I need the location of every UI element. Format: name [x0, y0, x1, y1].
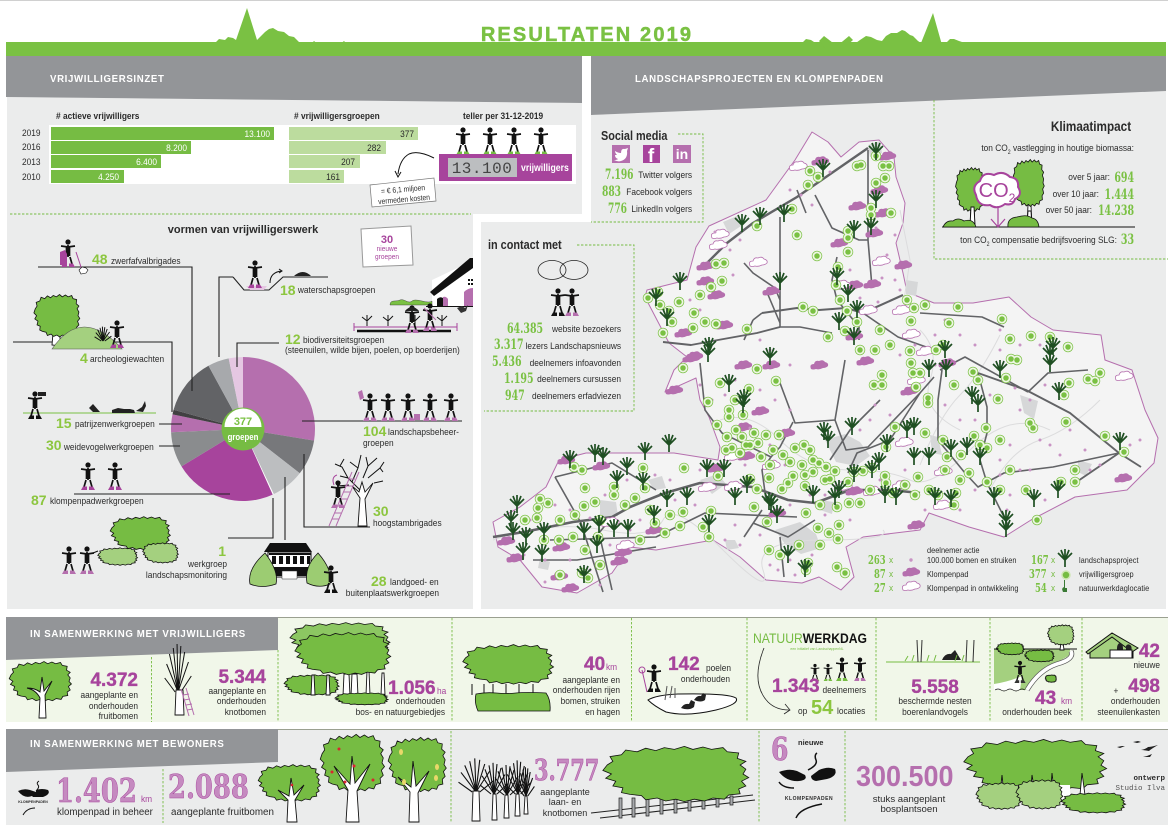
stat: 3.777 laan- en knotbomen: knotbomen — [543, 808, 587, 818]
label: 18 waterschapsgroepen — [280, 282, 375, 298]
stat: 2.088 fruitbomen: aangeplante fruitbomen — [171, 807, 274, 818]
stat: 3.777 laan- en knotbomen — [534, 753, 599, 818]
stat: 42 + 498 steenuilenkasten: steenuilenkasten — [1097, 706, 1160, 717]
icon: counter with volunteers: 13.100 — [452, 160, 512, 178]
label: 30 weidevogelwerkgroepen — [46, 437, 154, 453]
stat: 42 + 498 steenuilenkasten: + — [1114, 685, 1118, 696]
icon: tree on burial mound — [34, 295, 124, 349]
icon: meadow bird — [886, 640, 980, 662]
label: 30 weidevogelwerkgroepen: 30 — [46, 437, 62, 453]
chart: volunteers and groups bars: 8.200 — [166, 142, 187, 153]
pie leader lines — [13, 267, 462, 540]
heading: in contact met: in contact met — [488, 238, 562, 252]
chart: pie of 377 groups — [171, 357, 315, 501]
legend: map: Klompenpad — [927, 570, 968, 579]
chart: volunteers and groups bars: 377 — [400, 128, 414, 139]
panel: in contact met: 64.385 — [507, 319, 543, 336]
chart: volunteers and groups bars: 207 — [341, 156, 355, 167]
legend: map: 27 — [874, 581, 886, 595]
label: 30 weidevogelwerkgroepen: weidevogelwerkgroepen — [63, 441, 154, 452]
stat: 1.343 deelnemers op 54 locaties: op — [798, 705, 807, 716]
stat: 5.558 boerenlandvogels: beschermde nesten — [898, 695, 972, 706]
label: 30 hoogstambrigades — [373, 503, 442, 528]
callout: avoided costs: vermeden kosten — [378, 192, 430, 206]
stat: 40 km — [553, 654, 620, 717]
panel: landschapsprojecten — [481, 56, 1166, 609]
chart: volunteers and groups bars: # actieve vrijwilligers — [56, 110, 139, 121]
icon: bird watcher with partridges — [23, 391, 156, 419]
label: 4 archeologiewachten: 4 — [80, 350, 88, 366]
label: 12 biodiversiteitsgroepen — [285, 331, 460, 355]
panel: in contact met: deelnemers cursussen — [537, 373, 621, 384]
stat: 142 poelen — [668, 654, 731, 684]
legend: map: 377 — [1029, 567, 1047, 581]
chart: volunteers and groups bars: 2010 — [22, 171, 41, 182]
panel: in contact met: 947 — [505, 386, 525, 403]
icon: forest — [284, 623, 391, 705]
stat: 6 nieuwe klompenpaden — [771, 731, 836, 818]
map outline — [493, 132, 1158, 593]
chart: volunteers and groups bars: 6.400 — [136, 156, 157, 167]
stat: 4.372 fruitbomen: onderhouden — [89, 700, 138, 711]
chart: pie of 377 groups: 377 — [234, 416, 252, 428]
panel: klimaatimpact: over 5 jaar: — [1068, 171, 1110, 182]
stat: 40 km: aangeplante en — [562, 674, 620, 685]
stat: 300.500 bosplantsoen: stuks aangeplant — [873, 794, 946, 805]
stat: 300.500 bosplantsoen: bosplantsoen — [880, 804, 938, 815]
label: 48 zwerfafvalbrigades: 48 — [92, 251, 108, 267]
chart: volunteers and groups bars: 2016 — [22, 141, 41, 152]
panel: klimaatimpact: 694 — [1114, 168, 1134, 185]
icon: five landscape managers — [358, 390, 458, 421]
icon: ditch worker — [233, 260, 328, 290]
klompenpad blobs — [497, 151, 1132, 592]
landscape project markers — [504, 142, 1127, 583]
panel: in samenwerking met bewoners — [6, 729, 1168, 825]
label: 15 patrijzenwerkgroepen: 15 — [56, 415, 72, 431]
label: 12 biodiversiteitsgroepen: (steenuilen, wilde bijen, poelen, op boerderijen) — [285, 344, 460, 355]
chart: pie of 377 groups: groepen — [228, 431, 258, 442]
label: 12 biodiversiteitsgroepen: biodiversiteitsgroepen — [303, 334, 384, 345]
rivers and minor roads — [493, 210, 1100, 581]
icon: high-stem pruning with ladder — [329, 455, 384, 526]
stat: 5.344 knotbomen: knotbomen — [225, 706, 266, 717]
panel: klimaatimpact: 1.444 — [1105, 185, 1134, 202]
panel: klimaatimpact: 33 — [1121, 230, 1134, 247]
icon: owl nest box — [1086, 633, 1138, 658]
chart: volunteers and groups bars: 13.100 — [244, 128, 270, 139]
icon: biodiversity planting row — [354, 303, 468, 333]
callout: 30 nieuwe groepen: groepen — [375, 254, 399, 261]
panel: social media — [591, 129, 703, 222]
icon: four volunteers — [811, 658, 866, 681]
panel: in contact met: lezers Landschapsnieuws — [526, 340, 622, 351]
participant dots — [524, 172, 1140, 585]
stat: 1.056 ha — [356, 678, 446, 717]
stat: 142 poelen: 142 — [668, 654, 700, 675]
icon: CO2 cloud and trees — [942, 159, 1135, 227]
panel: vrijwilligersinzet — [6, 56, 582, 609]
icon: klompenpad logo small — [18, 781, 49, 815]
panel: in contact met — [484, 238, 634, 411]
icon: right skyline with church and trees — [803, 13, 967, 52]
legend: map: x — [889, 554, 894, 565]
panel: social media: 7.196 — [605, 167, 634, 182]
stat: 1.402 km — [56, 772, 154, 818]
icon: brook maintenance — [994, 625, 1077, 691]
panel: in samenwerking met vrijwilligers — [6, 617, 1168, 722]
heading: klimaatimpact: Klimaatimpact — [1051, 119, 1132, 134]
icon: pollard willow — [165, 644, 194, 716]
panel: in contact met: 3.317 — [494, 335, 524, 352]
label: 4 archeologiewachten: archeologiewachten — [90, 353, 164, 364]
label: 28 landgoed- en buitenplaatswerkgroepen: buitenplaatswerkgroepen — [346, 587, 439, 598]
klompenpad in ontwikkeling — [601, 161, 1133, 549]
callout: avoided costs — [370, 153, 436, 207]
label: 104 landschapsbeheergroepen: groepen — [363, 437, 394, 448]
label: 1 werkgroep landschapsmonitoring: 1 — [218, 543, 226, 559]
label: 87 klompenpadwerkgroepen — [31, 492, 144, 508]
legend: map: Klompenpad in ontwikkeling — [927, 584, 1019, 593]
stat: 5.344 knotbomen: 5.344 — [218, 667, 266, 688]
icon: hedge monitoring — [62, 517, 178, 574]
icon: CO2 cloud and trees: 2 — [1009, 191, 1016, 205]
roads — [493, 148, 1141, 592]
urban areas — [538, 141, 1092, 570]
label: 48 zwerfafvalbrigades: zwerfafvalbrigades — [111, 255, 181, 266]
label: 104 landschapsbeheergroepen: 104 — [363, 423, 387, 439]
panel: social media: Facebook volgers — [626, 186, 693, 197]
panel: in contact met: 5.436 — [492, 352, 522, 369]
stat: 5.344 knotbomen: aangeplante en — [208, 685, 266, 696]
panel: klimaatimpact — [934, 100, 1168, 259]
heading: social media: Social media — [601, 129, 668, 143]
icon: klompenpad logo small: KLOMPENPADEN — [18, 800, 48, 804]
stat: 142 poelen: onderhouden — [681, 673, 730, 684]
callout: 30 nieuwe groepen: nieuwe — [377, 246, 397, 253]
icon: social logos: in — [676, 146, 688, 162]
volunteer group markers — [525, 156, 1124, 578]
stat: 300.500 bosplantsoen: 300.500 — [856, 760, 953, 792]
icon: country house with hedges — [250, 543, 338, 593]
stat: 42 + 498 steenuilenkasten: 42 — [1139, 641, 1160, 662]
stat: 1.343 deelnemers op 54 locaties: locaties — [837, 705, 866, 716]
stat: 1.343 deelnemers op 54 locaties: deelnemers — [822, 684, 867, 695]
stat: 2.088 fruitbomen — [168, 768, 274, 818]
icon: row of pollard trees — [458, 758, 534, 821]
icon: tree lane — [591, 746, 755, 818]
legend: map: 100.000 bomen en struiken — [927, 556, 1016, 565]
credit: ontwerp studio ilva: Studio Ilva — [1115, 785, 1165, 793]
panel: social media: 776 — [608, 201, 627, 216]
legend: map: x — [1051, 568, 1056, 579]
stat: 42 + 498 steenuilenkasten: nieuwe — [1134, 659, 1160, 670]
label: 15 patrijzenwerkgroepen: patrijzenwerkgroepen — [75, 418, 155, 429]
legend: map: vrijwilligersgroep — [1079, 570, 1134, 579]
stat: 142 poelen: poelen — [706, 662, 731, 673]
stat: 300.500 bosplantsoen — [856, 760, 953, 815]
stat: 1.402 km: km — [141, 793, 152, 804]
stat: 3.777 laan- en knotbomen: laan- en — [549, 797, 581, 807]
stat: 1.343 deelnemers op 54 locaties: 1.343 — [772, 676, 820, 697]
icon: left skyline with church and trees — [216, 8, 360, 57]
label: 104 landschapsbeheergroepen — [363, 423, 459, 448]
panel: klimaatimpact: ton CO2 compensatie bedrijfsvoering SLG: — [960, 234, 1117, 248]
icon: two people talking — [538, 260, 588, 316]
label: 18 waterschapsgroepen: waterschapsgroepen — [297, 284, 375, 295]
icon: counter with volunteers — [439, 127, 572, 181]
stat: 42 + 498 steenuilenkasten: onderhouden — [1111, 695, 1160, 706]
icon: three fruit trees — [258, 734, 446, 822]
stat: 40 km: 40 — [584, 654, 605, 675]
stat: 2.088 fruitbomen: 2.088 — [168, 768, 249, 807]
icon: counter with volunteers: vrijwilligers — [521, 162, 569, 173]
chart: volunteers and groups bars — [22, 110, 576, 184]
icon: social logos — [612, 145, 691, 167]
legend: map: x — [889, 582, 894, 593]
legend: map: 87 — [874, 567, 886, 581]
icon: social logos: f — [648, 146, 655, 167]
legend: map: x — [1051, 582, 1056, 593]
stat: 43 km beek: 43 — [1035, 688, 1056, 709]
stat: 1.402 km: klompenpad in beheer — [57, 807, 154, 818]
legend: map: natuurwerkdaglocatie — [1079, 584, 1150, 593]
stat: 4.372 fruitbomen: aangeplante en — [80, 689, 138, 700]
panel: social media: LinkedIn volgers — [631, 203, 693, 214]
stat: 40 km: en hagen — [585, 706, 620, 717]
title: RESULTATEN 2019 — [481, 24, 693, 46]
map: Gelderland projects — [493, 132, 1158, 593]
label: 1 werkgroep landschapsmonitoring: landschapsmonitoring — [146, 569, 227, 580]
stat: 5.558 boerenlandvogels: boerenlandvogels — [902, 706, 968, 717]
label: 87 klompenpadwerkgroepen: 87 — [31, 492, 47, 508]
icon: CO2 cloud and trees: CO — [979, 180, 1009, 202]
icon: farmhouse — [390, 258, 473, 306]
legend: map: x — [889, 568, 894, 579]
panel: social media: 883 — [602, 184, 621, 199]
chart: volunteers and groups bars: 2019 — [22, 127, 41, 138]
logo: natuurwerkdag: NATUURWERKDAG — [753, 630, 867, 646]
stat: 42 + 498 steenuilenkasten — [1097, 641, 1160, 717]
stat: 5.558 boerenlandvogels: 5.558 — [911, 677, 959, 698]
label: 30 hoogstambrigades: 30 — [373, 503, 389, 519]
panel: in contact met: deelnemers erfadviezen — [532, 390, 621, 401]
label: 104 landschapsbeheergroepen: landschapsbeheer- — [388, 426, 459, 437]
panel: klimaatimpact: over 10 jaar: — [1053, 188, 1099, 199]
stat: 6 nieuwe klompenpaden: 6 — [771, 731, 788, 769]
credit: ontwerp studio ilva: ontwerp — [1133, 775, 1165, 783]
chart: volunteers and groups bars: # vrijwilligersgroepen — [294, 110, 380, 121]
icon: klompenpaden logo — [779, 753, 836, 818]
chart: volunteers and groups bars: 282 — [367, 142, 381, 153]
stat: 4.372 fruitbomen: 4.372 — [90, 670, 138, 691]
callout: avoided costs: = € 6,1 miljoen — [381, 183, 425, 196]
stat: 43 km beek — [1002, 688, 1072, 717]
heading: vormen van vrijwilligerswerk: vormen van vrijwilligerswerk — [168, 224, 319, 236]
label: 48 zwerfafvalbrigades — [92, 251, 181, 267]
label: 15 patrijzenwerkgroepen — [56, 415, 155, 431]
legend: map: landschapsproject — [1079, 556, 1139, 565]
logo: natuurwerkdag: een initiatief van LandschappenNL — [790, 647, 844, 651]
panel: in contact met: deelnemers infoavonden — [530, 357, 621, 368]
icon: litter collector — [60, 239, 88, 274]
panel: klimaatimpact: 14.238 — [1098, 201, 1134, 218]
panel: klimaatimpact: over 50 jaar: — [1046, 204, 1092, 215]
stat: 6 nieuwe klompenpaden: nieuwe — [798, 738, 823, 747]
stat: 1.056 ha: 1.056 — [388, 678, 436, 699]
label: 87 klompenpadwerkgroepen: klompenpadwerkgroepen — [50, 495, 144, 506]
label: 28 landgoed- en buitenplaatswerkgroepen: 28 — [371, 573, 387, 589]
label: 1 werkgroep landschapsmonitoring: werkgroep — [187, 558, 227, 569]
panel: in contact met: website bezoekers — [551, 323, 622, 334]
stat: 1.056 ha: ha — [437, 685, 446, 696]
stat: 1.056 ha: onderhouden — [396, 695, 445, 706]
label: 4 archeologiewachten — [80, 350, 164, 366]
icon: birds — [1117, 741, 1158, 757]
stat: 4.372 fruitbomen: fruitbomen — [99, 710, 138, 721]
icon: tree row with hedge — [463, 645, 554, 711]
callout: 30 nieuwe groepen — [361, 226, 413, 267]
legend: map: 54 — [1035, 581, 1047, 595]
icon: fruit tree — [9, 662, 71, 718]
label: 18 waterschapsgroepen: 18 — [280, 282, 296, 298]
heading: in samenwerking met bewoners: IN SAMENWERKING MET BEWONERS — [30, 739, 224, 750]
label: 28 landgoed- en buitenplaatswerkgroepen: landgoed- en — [390, 576, 439, 587]
legend: map — [868, 546, 1150, 595]
callout: 30 nieuwe groepen: 30 — [381, 234, 393, 246]
chart: volunteers and groups bars: teller per 31-12-2019 — [463, 110, 543, 121]
stat: 40 km: km — [606, 661, 617, 672]
stat: 40 km: bomen, struiken — [561, 695, 620, 706]
label: 12 biodiversiteitsgroepen: 12 — [285, 331, 301, 347]
stat: 6 nieuwe klompenpaden: KLOMPENPADEN — [785, 796, 833, 802]
icon: pond with ducks — [639, 664, 737, 714]
chart: volunteers and groups bars: 2013 — [22, 156, 41, 167]
heading: vrijwilligersinzet: VRIJWILLIGERSINZET — [50, 74, 165, 85]
icon: hikers with clogs — [81, 462, 122, 490]
heading: in samenwerking met vrijwilligers: IN SAMENWERKING MET VRIJWILLIGERS — [30, 629, 246, 640]
chart: volunteers and groups bars: 4.250 — [98, 171, 119, 182]
icon: forest planting — [964, 739, 1126, 813]
credit: ontwerp studio ilva — [1115, 775, 1165, 793]
label: 1 werkgroep landschapsmonitoring — [146, 543, 227, 580]
legend: map: 167 — [1031, 553, 1049, 567]
stat: 43 km beek: onderhouden beek — [1002, 706, 1072, 717]
legend: map: deelnemer actie — [927, 546, 980, 555]
header: green skyline band — [6, 8, 1166, 57]
chart: volunteers and groups bars: 161 — [326, 171, 340, 182]
stat: 1.402 km: 1.402 — [56, 772, 137, 811]
stat: 3.777 laan- en knotbomen: aangeplante — [540, 787, 590, 797]
stat: 3.777 laan- en knotbomen: 3.777 — [534, 753, 599, 788]
stat: 1.343 deelnemers op 54 locaties: 54 — [811, 697, 834, 719]
panel: social media: Twitter volgers — [638, 169, 693, 180]
heading: landschapsprojecten: LANDSCHAPSPROJECTEN EN KLOMPENPADEN — [635, 74, 884, 85]
arrow: natuurwerkdag — [758, 648, 790, 714]
legend: map: x — [1051, 554, 1056, 565]
stat: 5.344 knotbomen: onderhouden — [217, 695, 266, 706]
stat: 42 + 498 steenuilenkasten: 498 — [1128, 676, 1160, 697]
stat: 4.372 fruitbomen — [80, 670, 138, 721]
stat: 40 km: onderhouden rijen — [553, 684, 620, 695]
label: 30 hoogstambrigades: hoogstambrigades — [373, 517, 442, 528]
stat: 1.343 deelnemers op 54 locaties — [772, 676, 867, 719]
legend: map: 263 — [868, 553, 886, 567]
panel: klimaatimpact: ton CO2 vastlegging in houtige biomassa: — [981, 142, 1134, 156]
panel: in contact met: 1.195 — [504, 369, 534, 386]
stat: 5.344 knotbomen — [208, 667, 266, 717]
label: 28 landgoed- en buitenplaatswerkgroepen — [346, 573, 439, 598]
stat: 5.558 boerenlandvogels — [898, 677, 972, 717]
stat: 1.056 ha: bos- en natuurgebiedjes — [356, 706, 446, 717]
stat: 43 km beek: km — [1061, 695, 1072, 706]
